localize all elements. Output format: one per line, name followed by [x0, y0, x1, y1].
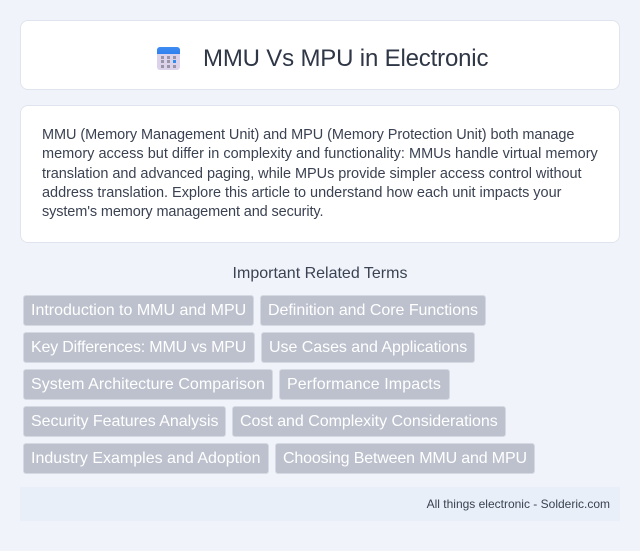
tag: Use Cases and Applications — [269, 339, 467, 356]
panel: related term tags — [23, 295, 535, 474]
tag: System Architecture Comparison — [31, 376, 265, 393]
tag — [275, 443, 535, 474]
tag: Choosing Between MMU and MPU — [283, 450, 527, 467]
title: MMU Vs MPU in Electronic — [203, 45, 488, 72]
tag — [232, 406, 506, 437]
text block: description: system's memory management and security. — [42, 204, 323, 220]
text block: description: address translation. Explore this article to understand how each unit impacts your — [42, 185, 561, 201]
text block: description — [42, 127, 598, 220]
panel: description card — [20, 105, 620, 243]
tag — [260, 295, 486, 326]
tag: Key Differences: MMU vs MPU — [31, 339, 246, 356]
text block: description: translation and advanced paging, while MPUs provide simpler access control without — [42, 166, 582, 182]
tag — [279, 369, 450, 400]
icon: calendar grid — [157, 47, 180, 70]
tag — [23, 406, 226, 437]
tag — [23, 443, 269, 474]
footer credit: All things electronic - Solderic.com — [427, 497, 610, 511]
tag: Industry Examples and Adoption — [31, 450, 260, 467]
heading: important related terms: Important Related Terms — [233, 265, 407, 282]
tag: Introduction to MMU and MPU — [31, 302, 246, 319]
tag — [261, 332, 475, 363]
tag: Definition and Core Functions — [268, 302, 478, 319]
tag: Cost and Complexity Considerations — [240, 413, 498, 430]
footer bar — [20, 487, 620, 521]
text block: description: MMU (Memory Management Unit) and MPU (Memory Protection Unit) both manage — [42, 127, 574, 143]
tag — [23, 332, 255, 363]
tag: Performance Impacts — [287, 376, 441, 393]
tag — [23, 369, 273, 400]
panel: title card — [20, 20, 620, 90]
tag: Security Features Analysis — [31, 413, 218, 430]
text block: description: memory access but differ in complexity and functionality: MMUs handle virtual memory — [42, 146, 598, 162]
tag — [23, 295, 254, 326]
